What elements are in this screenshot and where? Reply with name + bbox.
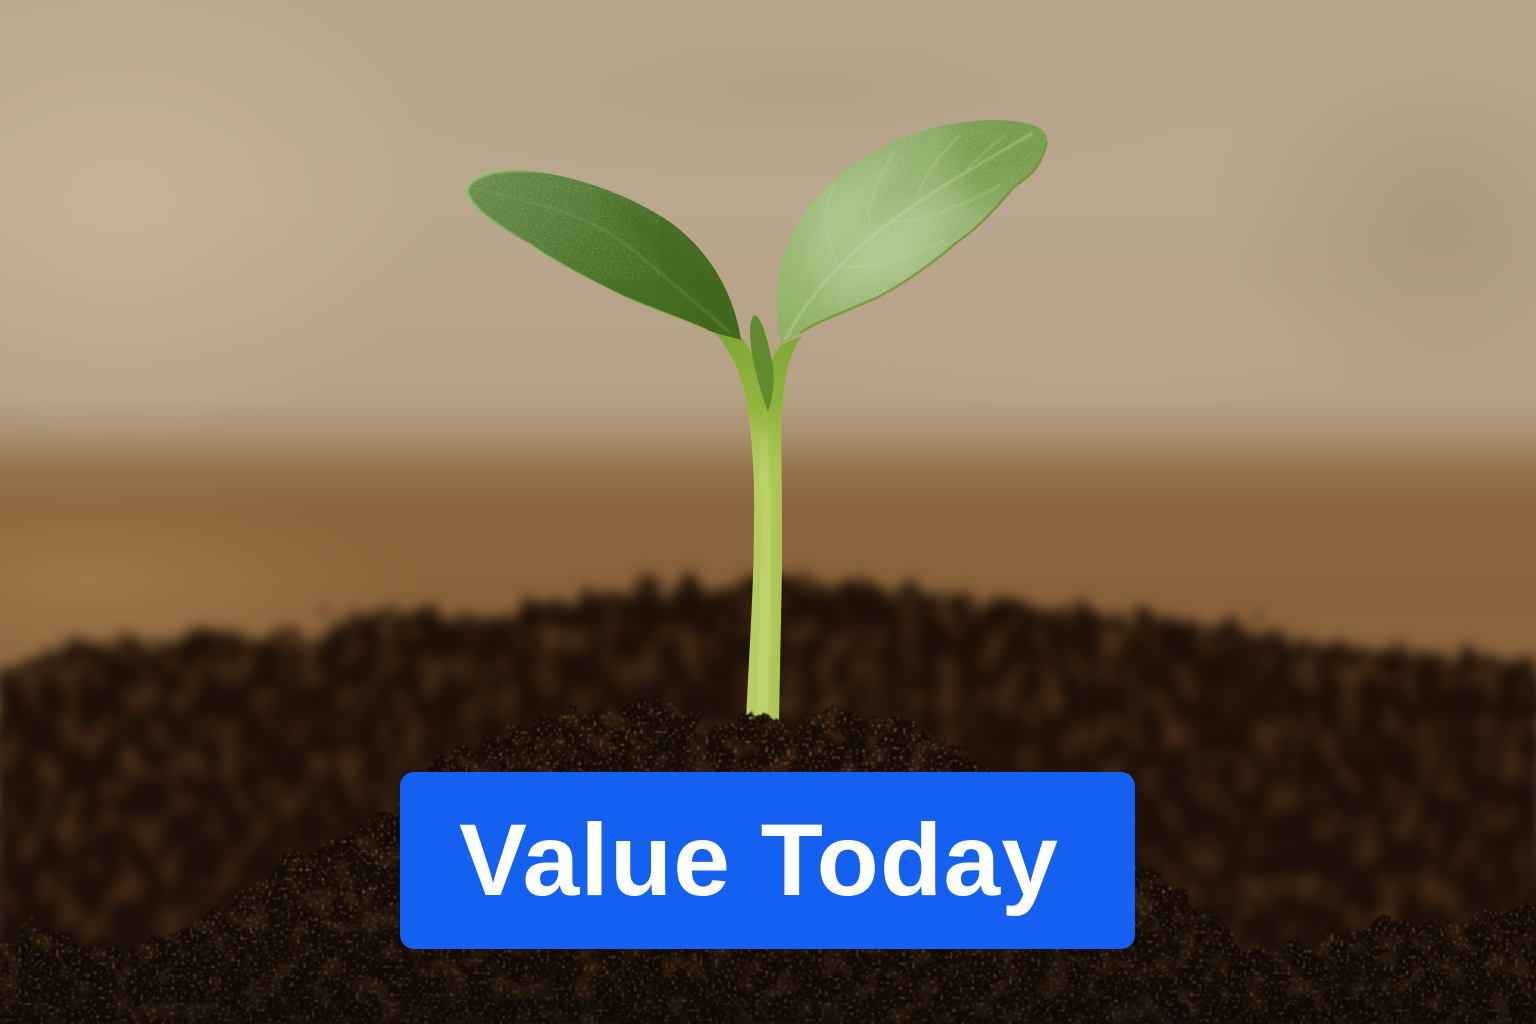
seedling	[460, 120, 1055, 722]
soil: lower vignette	[0, 600, 1536, 1024]
left leaf	[460, 160, 745, 340]
central bud	[750, 315, 774, 412]
soil: blurred far mound	[0, 578, 1536, 1024]
label: Value Today	[400, 772, 1135, 949]
stem	[715, 333, 802, 722]
right leaf	[777, 120, 1055, 345]
soil: sharp foreground mound	[0, 700, 1536, 1024]
soil: clump at stem base	[720, 708, 870, 775]
label: Value Today: Value Today	[459, 803, 1058, 917]
soil: dark underlay	[0, 672, 1536, 1024]
